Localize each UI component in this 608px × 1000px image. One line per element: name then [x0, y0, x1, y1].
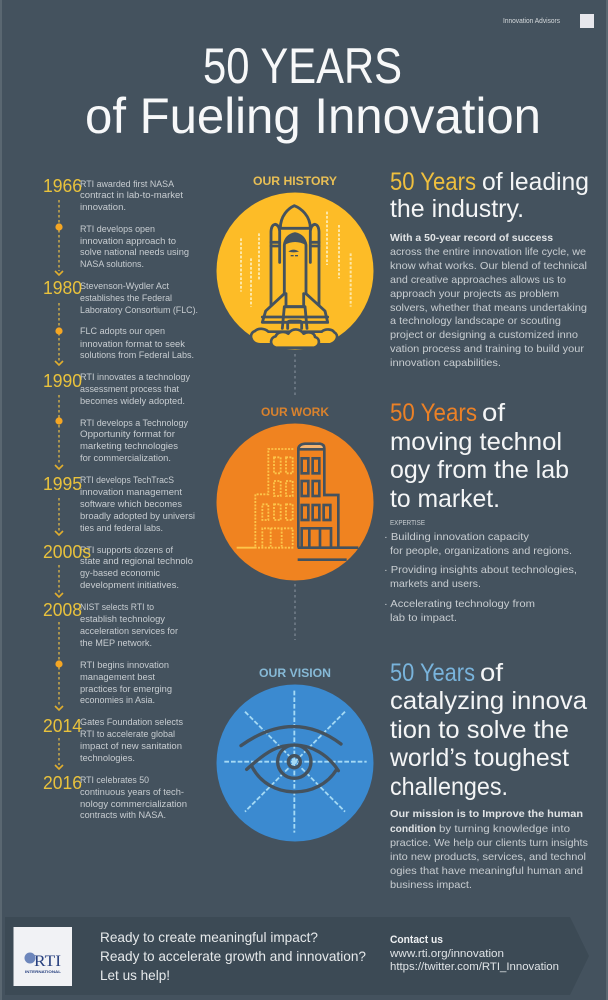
timeline descriptions: gy-based economic — [80, 568, 160, 579]
timeline descriptions: solutions from Federal Labs. — [80, 350, 194, 361]
contact details — [389, 934, 559, 973]
heading: leading the industry: 50 Years — [390, 168, 476, 196]
heading: catalyzing innovation — [389, 659, 587, 801]
timeline years: 1995 — [43, 473, 82, 494]
contact details: https://twitter.com/RTI_Innovation — [390, 961, 559, 973]
heading: catalyzing innovation: 50 Years — [390, 659, 475, 687]
text block: expertise list — [384, 518, 577, 624]
timeline descriptions: software which becomes — [80, 499, 182, 510]
timeline descriptions: management best — [80, 672, 155, 683]
heading: catalyzing innovation: world’s toughest — [389, 744, 569, 772]
text block: mission body: practice. We help our clients turn insights — [390, 838, 588, 849]
timeline descriptions: becomes widely adopted. — [80, 396, 185, 407]
timeline descriptions: broadly adopted by universi — [80, 511, 195, 522]
timeline descriptions: practices for emerging — [80, 684, 172, 695]
heading: leading the industry: the industry. — [390, 195, 524, 223]
timeline descriptions: Gates Foundation selects — [80, 717, 183, 728]
timeline descriptions: RTI develops a Technology — [80, 418, 188, 429]
timeline descriptions: RTI develops TechTracS — [80, 475, 174, 486]
text block: history body: a technology landscape or scouting — [390, 316, 561, 327]
timeline descriptions — [80, 179, 198, 821]
heading: moving technology: to market. — [390, 485, 500, 513]
heading: leading the industry: of leading — [482, 168, 589, 196]
text block: mission body: business impact. — [390, 880, 472, 891]
icon: space shuttle in yellow circle — [216, 192, 374, 350]
icon: buildings in orange circle — [216, 424, 374, 580]
timeline years: 1966 — [43, 175, 82, 196]
call to action: Ready to create meaningful impact? — [100, 930, 318, 945]
contact details: Contact us — [390, 934, 443, 946]
panel: our vision text — [389, 659, 588, 891]
panel: our work text — [384, 399, 577, 624]
heading: catalyzing innovation: catalyzing innova — [390, 687, 587, 715]
timeline descriptions: innovation format to seek — [80, 339, 185, 350]
timeline descriptions: RTI to accelerate global — [80, 729, 175, 740]
text block: mission body — [390, 809, 588, 891]
timeline descriptions: Opportunity format for — [80, 429, 176, 440]
logo: RTI International — [14, 927, 72, 986]
timeline descriptions: establishes the Federal — [80, 293, 172, 304]
timeline descriptions: marketing technologies — [80, 441, 178, 452]
heading: moving technology — [390, 399, 569, 513]
text block: expertise list: EXPERTISE — [390, 518, 425, 527]
timeline descriptions: impact of new sanitation — [80, 741, 182, 752]
timeline years: 2000s — [43, 541, 91, 562]
timeline descriptions: RTI celebrates 50 — [80, 775, 149, 786]
panel: our history text — [390, 168, 589, 369]
title: 50 YEARS — [203, 38, 402, 94]
text block: history body: and creative approaches allows us to — [390, 275, 566, 286]
logo: RTI International: RTI — [34, 953, 61, 970]
call to action: Ready to accelerate growth and innovation? — [100, 949, 366, 964]
timeline descriptions: NASA solutions. — [80, 259, 144, 270]
timeline descriptions: the MEP network. — [80, 638, 152, 649]
timeline descriptions: nology commercialization — [80, 799, 187, 810]
text block: history body: approach your projects as problem — [390, 289, 559, 300]
timeline descriptions: establish technology — [80, 614, 165, 625]
timeline years: 2014 — [43, 715, 82, 736]
timeline descriptions: assessment process that — [80, 384, 179, 395]
text block: expertise list: · Building innovation capacity — [384, 532, 530, 543]
timeline years: 1980 — [43, 277, 82, 298]
text block: mission body: Our mission is to Improve the human — [390, 809, 583, 820]
timeline years: 2008 — [43, 599, 82, 620]
text block: history body: solvers, whether that means undertaking — [390, 303, 587, 314]
text block: history body: across the entire innovation life cycle, we — [390, 247, 586, 258]
timeline descriptions: contracts with NASA. — [80, 810, 166, 821]
heading: leading the industry — [390, 168, 589, 223]
timeline descriptions: innovation management — [80, 487, 182, 498]
connectors between circles — [294, 354, 296, 640]
heading: catalyzing innovation: of — [480, 659, 503, 687]
text block: history body: know what works. Our blend of technical — [390, 261, 587, 272]
text block: expertise list: markets and users. — [390, 579, 481, 590]
timeline descriptions: continuous years of tech- — [80, 787, 184, 798]
timeline descriptions: acceleration services for — [80, 626, 179, 637]
text block: expertise list: · Accelerating technology from — [384, 599, 535, 610]
heading: moving technology: 50 Years — [390, 399, 477, 427]
heading: catalyzing innovation: tion to solve the — [390, 716, 569, 744]
brand tag: Innovation Advisors — [503, 14, 594, 28]
timeline descriptions: for commercialization. — [80, 453, 171, 464]
timeline descriptions: contract in lab-to-market — [80, 190, 183, 201]
timeline descriptions: NIST selects RTI to — [80, 602, 154, 613]
timeline descriptions: innovation approach to — [80, 236, 176, 247]
timeline descriptions: RTI begins innovation — [80, 660, 169, 671]
text block: history body: innovation capabilities. — [390, 358, 501, 369]
timeline years: 1990 — [43, 370, 82, 391]
timeline descriptions: Laboratory Consortium (FLC). — [80, 305, 198, 316]
text block: mission body: condition — [390, 824, 436, 835]
timeline descriptions: solve national needs using — [80, 247, 189, 258]
timeline descriptions: Stevenson-Wydler Act — [80, 281, 169, 292]
text block: history body — [390, 233, 587, 369]
timeline descriptions: ties and federal labs. — [80, 523, 163, 534]
timeline descriptions: RTI innovates a technology — [80, 372, 190, 383]
title: of Fueling Innovation — [85, 88, 541, 144]
call to action — [100, 930, 366, 983]
timeline descriptions: development initiatives. — [80, 580, 179, 591]
text block: mission body: by turning knowledge into — [439, 824, 570, 835]
timeline years — [43, 175, 91, 793]
timeline descriptions: state and regional technolo — [80, 556, 193, 567]
text block: mission body: ogies that have meaningful human and — [390, 866, 583, 877]
contact details: www.rti.org/innovation — [389, 948, 504, 960]
logo: RTI International: INTERNATIONAL — [25, 970, 62, 974]
heading: our work: OUR WORK — [261, 405, 329, 419]
title — [85, 38, 541, 144]
timeline descriptions: economies in Asia. — [80, 695, 155, 706]
text block: history body: vation process and training to build your — [390, 344, 585, 355]
timeline descriptions: RTI develops open — [80, 224, 155, 235]
timeline years: 2016 — [43, 772, 82, 793]
heading: moving technology: moving technol — [390, 428, 562, 456]
timeline axis with dots and arrows — [55, 200, 63, 769]
heading: our history: OUR HISTORY — [253, 174, 337, 188]
heading: moving technology: ogy from the lab — [390, 456, 569, 484]
text block: mission body: into new products, services, and technol — [390, 852, 586, 863]
timeline descriptions: RTI awarded first NASA — [80, 179, 175, 190]
heading: catalyzing innovation: challenges. — [390, 773, 508, 801]
text block: expertise list: · Providing insights about technologies, — [384, 565, 577, 576]
text block: history body: With a 50-year record of success — [390, 233, 553, 244]
brand tag: Innovation Advisors: Innovation Advisors — [503, 16, 560, 25]
text block: history body: project or designing a customized inno — [390, 330, 578, 341]
timeline descriptions: FLC adopts our open — [80, 326, 165, 337]
timeline descriptions: technologies. — [80, 753, 135, 764]
footer banner — [5, 917, 589, 995]
timeline descriptions: RTI supports dozens of — [80, 545, 173, 556]
text block: expertise list: for people, organizations and regions. — [390, 546, 572, 557]
heading: moving technology: of — [482, 399, 505, 427]
timeline descriptions: innovation. — [80, 202, 126, 213]
heading: our vision: OUR VISION — [259, 666, 331, 680]
icon: eye in blue circle — [216, 684, 374, 842]
call to action: Let us help! — [100, 968, 170, 983]
text block: expertise list: lab to impact. — [390, 613, 457, 624]
